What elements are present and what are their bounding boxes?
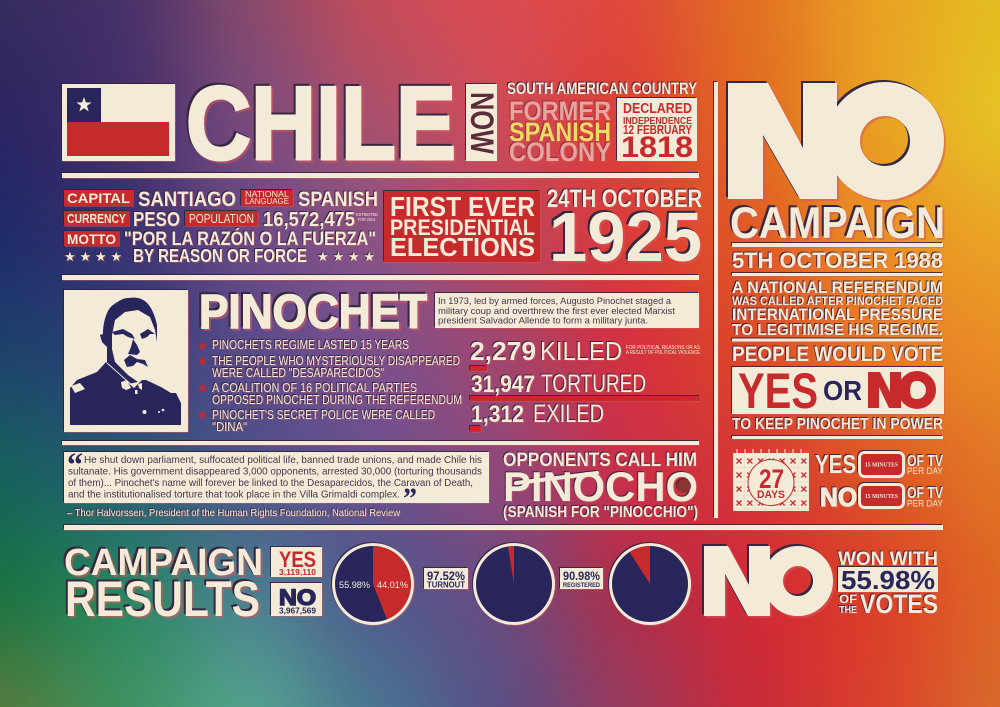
heading: No: N	[730, 56, 836, 232]
wordplay: Pinocho with struck nose: PINOCHO	[503, 463, 698, 510]
quote panel	[64, 447, 489, 515]
heading: Campaign: CAMPAIGN	[730, 199, 945, 248]
panel: won with 55.98 percent: 55.98%	[841, 565, 935, 595]
label: Now box: NOW	[464, 92, 500, 155]
panel: country facts	[64, 188, 379, 266]
icon: TV: 15 MINUTES	[865, 462, 898, 468]
list: Pinochet facts: "DINA"	[212, 420, 247, 434]
panel: first ever presidential elections	[384, 191, 540, 262]
panel: yes or no: OR	[823, 375, 862, 406]
label: motto: MOTTO	[67, 231, 116, 247]
text block: referendum: INTERNATIONAL PRESSURE	[732, 306, 943, 324]
row: no TV time	[820, 482, 944, 512]
text block: coup description: In 1973, led by armed forces, Augusto Pinochet staged a	[438, 296, 672, 307]
row: yes TV time: OF TV	[907, 453, 943, 470]
icon: TV: 15 MINUTES	[865, 493, 898, 500]
icon: 27 days calendar: 27	[759, 464, 784, 494]
icon: Chilean flag	[62, 84, 175, 161]
note: estimated	[356, 212, 379, 222]
panel: won with 55.98 percent: OF	[839, 592, 857, 606]
facts: Former Spanish colony: SPANISH	[509, 117, 611, 147]
stat: exiled	[470, 400, 604, 432]
panel: first ever presidential elections: FIRST EVER	[390, 191, 535, 222]
label: capital: CAPITAL	[67, 190, 130, 206]
list: Pinochet facts: ★	[197, 354, 208, 368]
text block: coup description	[435, 293, 699, 328]
chart: vote share pie	[332, 543, 414, 625]
title: Chile: CHILE	[186, 66, 456, 182]
heading: campaign results	[64, 542, 263, 627]
text: people would vote: PEOPLE WOULD VOTE	[732, 343, 943, 366]
quote panel: of them)... Pinochet's name will forever be linked to the Desaparecidos, the Caravan of Death,	[68, 477, 473, 489]
heading: No	[728, 55, 943, 232]
heading: opponents call him: OPPONENTS CALL HIM	[503, 449, 697, 471]
label: turnout: 97.52%	[427, 569, 465, 583]
list: Pinochet facts: PINOCHETS REGIME LASTED 15 YEARS	[212, 338, 409, 352]
row: no TV time: NO	[820, 482, 857, 512]
panel: no votes: 3,967,569	[279, 606, 317, 616]
note: estimated: ESTIMATED	[356, 212, 379, 217]
facts: Former Spanish colony	[509, 96, 611, 167]
translation with stars: ★★★★	[317, 250, 375, 265]
note: killed: A RESULT OF POLITICAL VIOLENCE	[626, 350, 701, 356]
caption: Spanish for Pinocchio: (SPANISH FOR "PINOCCHIO")	[503, 504, 698, 521]
facts: South American country: SOUTH AMERICAN COUNTRY	[507, 79, 698, 98]
panel: Pinochet portrait	[64, 290, 188, 432]
quote panel: He shut down parliament, suffocated political life, banned trade unions, and made Chile his	[84, 454, 482, 466]
stat: killed: KILLED	[540, 336, 622, 366]
row: no TV time: OF TV	[907, 485, 943, 502]
text block: referendum: WAS CALLED AFTER PINOCHET FACED	[732, 296, 943, 308]
label: registered	[560, 568, 603, 589]
value: Spanish: SPANISH	[298, 188, 378, 211]
row: yes TV time: YES	[815, 449, 856, 479]
quote panel: ”	[403, 482, 417, 515]
text: to keep Pinochet in power: TO KEEP PINOCHET IN POWER	[732, 416, 943, 433]
facts: Former Spanish colony: FORMER	[509, 96, 611, 126]
chart: repression statistics	[470, 336, 701, 432]
text block: coup description: president Salvador Allende to form a military junta.	[438, 316, 648, 326]
text block: referendum: A NATIONAL REFERENDUM	[732, 279, 943, 297]
panel: first ever presidential elections: ELECTIONS	[390, 232, 535, 262]
panel: won with 55.98 percent: WON WITH	[838, 548, 938, 570]
value: motto: "POR LA RAZÓN O LA FUERZA"	[124, 228, 376, 250]
panel: yes votes: YES	[279, 547, 316, 572]
value: Santiago: SANTIAGO	[138, 188, 236, 211]
value: population count: 16,572,475	[263, 209, 355, 231]
stat: exiled: EXILED	[533, 400, 604, 428]
label: registered: REGISTERED	[563, 582, 600, 589]
panel: declared independence: INDEPENDENCE	[623, 115, 692, 127]
stat: tortured: TORTURED	[541, 370, 646, 398]
heading: No result: N	[705, 530, 769, 635]
row: yes TV time	[815, 449, 944, 479]
translation with stars: BY REASON OR FORCE	[133, 246, 307, 266]
row: yes TV time: PER DAY	[907, 466, 944, 477]
note: estimated: FOR 2013	[358, 217, 375, 222]
icon: 27 days calendar	[733, 449, 809, 511]
heading: No result	[704, 530, 831, 635]
text block: referendum: TO LEGITIMISE HIS REGIME.	[732, 322, 943, 339]
chart: vote share pie: 44.01%	[377, 580, 409, 591]
label: currency: CURRENCY	[67, 212, 127, 226]
panel: declared independence: DECLARED	[623, 101, 692, 117]
panel: declared independence: 1818	[621, 131, 693, 164]
heading: No result: O	[765, 530, 831, 635]
label: turnout	[424, 568, 468, 590]
chart: registered pie	[609, 543, 691, 625]
text block: coup description: military coup and overthrew the first ever elected Marxist	[438, 306, 675, 317]
panel: first ever presidential elections: PRESIDENTIAL	[390, 215, 535, 240]
stat: killed	[470, 336, 622, 371]
list: Pinochet facts: THE PEOPLE WHO MYSTERIOUSLY DISAPPEARED	[212, 354, 460, 368]
panel: won with 55.98 percent: THE	[839, 605, 857, 616]
panel: won with 55.98 percent: VOTES	[860, 589, 938, 619]
panel: yes votes: 3,119,110	[279, 568, 317, 577]
translation with stars: ★★★★	[64, 250, 122, 265]
translation with stars	[64, 246, 375, 266]
label: national language	[241, 190, 293, 206]
panel: yes or no: YES	[738, 363, 818, 419]
note: killed	[626, 345, 701, 356]
heading: campaign results: CAMPAIGN	[64, 542, 263, 584]
heading: No: O	[829, 55, 943, 231]
panel: yes votes	[271, 547, 322, 577]
label: population: POPULATION	[189, 212, 254, 226]
list: Pinochet facts: PINOCHET'S SECRET POLICE WERE CALLED	[212, 408, 435, 422]
icon: 27 days calendar: DAYS	[757, 489, 785, 501]
note: killed: FOR POLITICAL REASONS OR AS	[626, 345, 701, 351]
panel: declared independence	[617, 98, 697, 164]
facts: Former Spanish colony: COLONY	[509, 137, 611, 167]
row: no TV time: PER DAY	[907, 498, 944, 510]
stat: killed: 2,279	[470, 336, 536, 366]
list: Pinochet facts: ★	[197, 381, 208, 395]
panel: no votes: NO	[279, 585, 316, 610]
list: Pinochet facts: ★	[197, 408, 208, 422]
stat: tortured: 31,947	[471, 371, 535, 398]
label: turnout: TURNOUT	[427, 580, 465, 590]
heading: campaign results: RESULTS	[65, 571, 260, 627]
list: Pinochet facts: WERE CALLED "DESAPARECIDOS"	[212, 366, 384, 380]
text block: referendum	[732, 279, 943, 339]
date: 24th October: 24TH OCTOBER	[547, 185, 702, 213]
chart: vote share pie: 55.98%	[339, 580, 371, 591]
date: 5th October 1988: 5TH OCTOBER 1988	[732, 248, 943, 273]
value: Peso: PESO	[133, 209, 180, 231]
panel: declared independence: 12 FEBRUARY	[623, 123, 693, 137]
stat: tortured	[470, 370, 700, 401]
panel: yes or no: NO	[869, 365, 937, 418]
heading: Pinochet: PINOCHET	[199, 286, 427, 339]
quote attribution: – Thor Halvorssen, President of the Human Rights Foundation, National Review	[67, 508, 401, 519]
date: 1925: 1925	[549, 198, 702, 276]
label: national language: LANGUAGE	[245, 197, 289, 206]
list: Pinochet facts: ★	[197, 339, 208, 353]
quote panel: and the institutionalised torture that took place in the Villa Grimaldi complex.	[68, 488, 400, 500]
label: national language: NATIONAL	[245, 190, 290, 199]
quote panel: sultanate. His government disappeared 3,000 opponents, arrested 30,000 (torturing thousands	[68, 466, 482, 478]
label: registered: 90.98%	[563, 569, 600, 583]
list: Pinochet facts	[197, 338, 462, 434]
quote panel: “	[67, 447, 83, 484]
panel: no votes	[271, 583, 322, 616]
stat: exiled: 1,312	[471, 401, 524, 428]
list: Pinochet facts: OPPOSED PINOCHET DURING THE REFERENDUM	[212, 393, 462, 407]
panel: won with 55.98 percent	[838, 548, 938, 619]
chart: turnout pie	[473, 543, 555, 625]
panel: yes or no	[732, 363, 944, 419]
list: Pinochet facts: A COALITION OF 16 POLITICAL PARTIES	[212, 381, 417, 395]
